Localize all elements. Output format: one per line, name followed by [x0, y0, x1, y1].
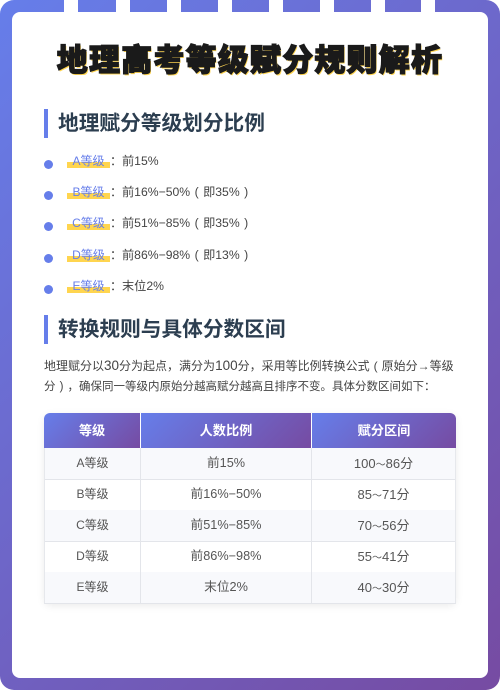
row: C: 70～56分 [358, 518, 409, 533]
item: grade C: ( [195, 216, 199, 230]
row: E: 末位2% [204, 580, 248, 594]
item: grade D: ： [110, 248, 122, 262]
item: grade C: ) [244, 216, 248, 230]
item: grade D: D等级 [72, 248, 105, 262]
item: grade B: B等级 [72, 185, 104, 199]
row: B [44, 479, 456, 511]
row: D: D等级 [76, 549, 109, 563]
item: grade E [44, 279, 164, 294]
item: grade B [44, 185, 248, 200]
text block: conversion description: 分 ，确保同一等级内原始分越高赋分越高且排序不变。具体分数区间如下： [44, 380, 436, 392]
heading: conversion rules: 转换规则与具体分数区间 [58, 318, 286, 341]
heading: grade proportions: 地理赋分等级划分比例 [58, 112, 265, 135]
row: A: 100～86分 [354, 456, 413, 471]
item: grade D [44, 248, 248, 263]
item: grade C: ： [110, 216, 122, 230]
item: grade C: C等级 [72, 216, 105, 230]
heading: grade proportions [44, 109, 464, 138]
item: grade D: ) [244, 248, 248, 262]
heading: conversion rules [44, 315, 464, 344]
text block: conversion description: 地理赋分以30分为起点，满分为100分，采用等比例转换公式 原始分→等级 [44, 358, 454, 373]
item: grade E: ： [110, 279, 122, 293]
item: grade A [44, 154, 159, 169]
table header [44, 413, 456, 448]
row: D: 前86%−98% [191, 549, 261, 563]
title: 地理高考等级赋分规则解析 [57, 43, 443, 78]
table: score ranges [44, 413, 456, 604]
row: A [44, 448, 456, 480]
table header: 人数比例 [200, 423, 252, 438]
text block: conversion description: ( [374, 359, 378, 373]
row: A: A等级 [76, 456, 108, 470]
text block: conversion description: ) [60, 380, 63, 392]
item: grade D: ( [195, 248, 199, 262]
row: D: 55～41分 [358, 549, 409, 564]
text block: conversion description [44, 358, 454, 392]
item: grade C [44, 216, 248, 231]
row: C: C等级 [76, 518, 109, 532]
row: A: 前15% [207, 456, 245, 470]
row: D [44, 541, 456, 573]
item: grade B: ( [195, 185, 199, 199]
row: C: 前51%−85% [191, 518, 261, 532]
row: E: E等级 [76, 580, 108, 594]
table header: 等级 [79, 423, 105, 438]
item: grade A: 前15% [122, 154, 159, 168]
item: grade A: ： [110, 154, 122, 168]
item: grade D: 前86%−98% 即13% [122, 248, 240, 262]
row: E: 40～30分 [358, 580, 409, 595]
item: grade A: A等级 [72, 154, 104, 168]
row: E [44, 572, 456, 604]
table header: 赋分区间 [358, 423, 410, 438]
item: grade B: 前16%−50% 即35% [122, 185, 240, 199]
row: B: 85～71分 [358, 487, 409, 502]
item: grade C: 前51%−85% 即35% [122, 216, 240, 230]
row: B: B等级 [76, 487, 108, 501]
row: B: 前16%−50% [191, 487, 261, 501]
item: grade B: ： [110, 185, 122, 199]
item: grade E: E等级 [72, 279, 104, 293]
item: grade B: ) [244, 185, 248, 199]
list: grade proportions [44, 154, 248, 294]
item: grade E: 末位2% [122, 279, 164, 293]
row: C [44, 510, 456, 542]
